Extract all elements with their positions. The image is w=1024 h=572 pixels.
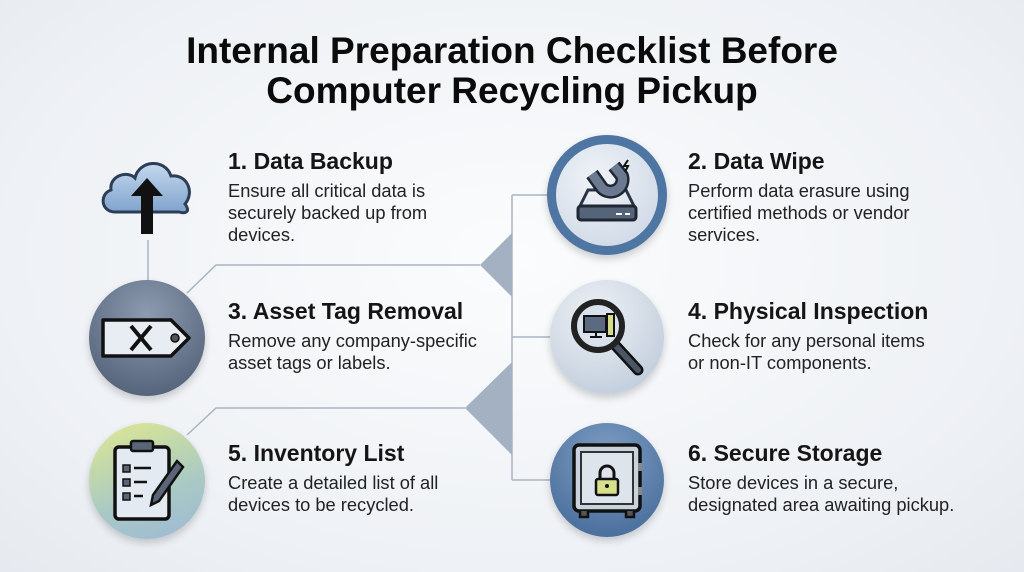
item 5 text: devices to be recycled. <box>228 494 414 515</box>
item 5 text: 5. Inventory List <box>228 440 404 466</box>
item 6 text: 6. Secure Storage <box>688 440 882 466</box>
item 4 text: or non-IT components. <box>688 352 872 373</box>
item 2 text: Perform data erasure using <box>688 180 910 201</box>
circle: data wipe <box>547 135 667 255</box>
circle: asset tag <box>89 280 205 396</box>
icon: safe with lock <box>572 443 642 518</box>
icon: clipboard with pen <box>113 440 185 521</box>
item 3 text <box>228 298 477 373</box>
circle: physical inspection <box>550 280 664 394</box>
item 2 text <box>688 148 910 245</box>
item 3 text: Remove any company-specific <box>228 330 477 351</box>
item 1 text: devices. <box>228 224 295 245</box>
item 1 text <box>228 148 427 245</box>
item 5 text: Create a detailed list of all <box>228 472 438 493</box>
item 2 text: 2. Data Wipe <box>688 148 825 174</box>
item 1 text: Ensure all critical data is <box>228 180 425 201</box>
item 3 text: 3. Asset Tag Removal <box>228 298 463 324</box>
title: Internal Preparation Checklist Before <box>186 30 838 71</box>
item 1 text: 1. Data Backup <box>228 148 393 174</box>
item 6 text <box>688 440 954 515</box>
item 4 text: 4. Physical Inspection <box>688 298 928 324</box>
item 2 text: services. <box>688 224 760 245</box>
circle: secure storage <box>550 423 664 537</box>
item 5 text <box>228 440 438 515</box>
item 6 text: Store devices in a secure, <box>688 472 898 493</box>
icon: magnifier with computer <box>571 299 644 376</box>
item 4 text <box>688 298 928 373</box>
icon: tag with X <box>101 318 191 358</box>
item 2 text: certified methods or vendor <box>688 202 910 223</box>
title <box>186 30 838 111</box>
icon: magnet and drive <box>576 160 638 222</box>
title: Computer Recycling Pickup <box>266 70 758 111</box>
circle: inventory list <box>89 423 205 539</box>
item 6 text: designated area awaiting pickup. <box>688 494 954 515</box>
icon: cloud upload <box>102 162 191 234</box>
item 4 text: Check for any personal items <box>688 330 925 351</box>
item 3 text: asset tags or labels. <box>228 352 391 373</box>
item 1 text: securely backed up from <box>228 202 427 223</box>
